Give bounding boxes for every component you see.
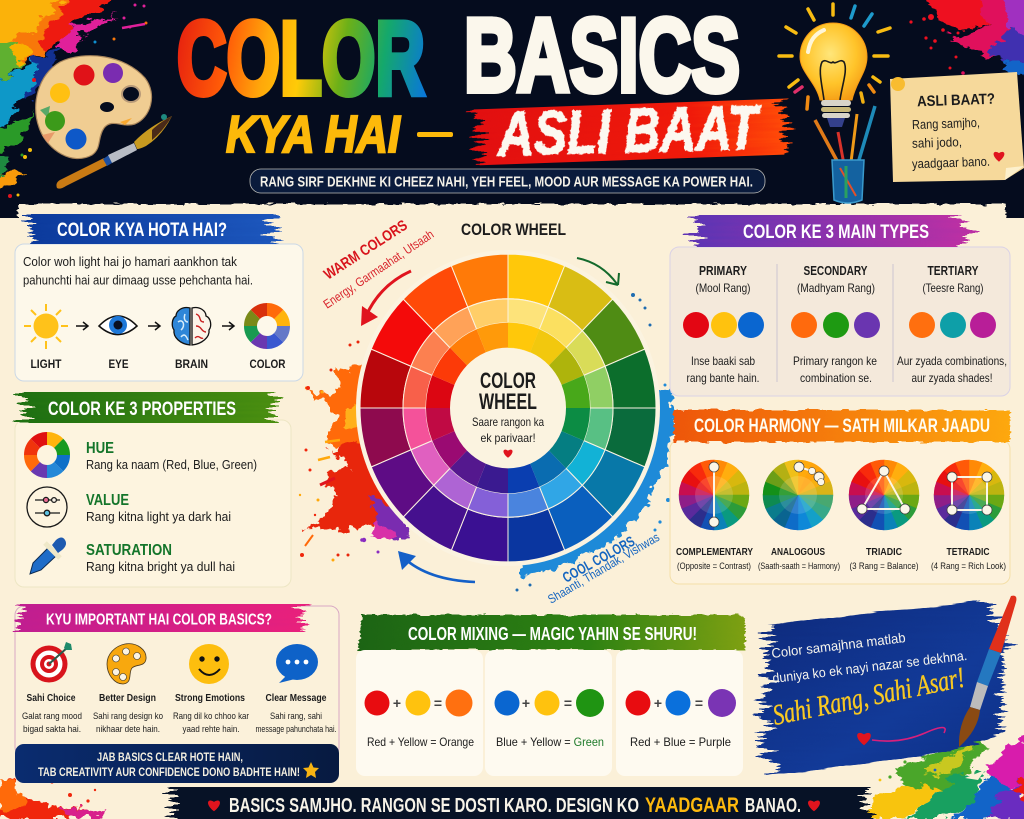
label: warm colors: Energy, Garmaahat, Utsaah: [321, 227, 436, 311]
column: sahi choice: bigad sakta hai.: [23, 724, 81, 735]
harmony: triadic: [847, 458, 921, 571]
card: red yellow: Red + Yellow = Orange: [367, 735, 474, 749]
subtitle: KYA HAI: KYA HAI: [226, 106, 401, 164]
arrow: warm: [361, 271, 411, 326]
column: strong emotions: [173, 692, 249, 735]
card: red blue: +: [654, 695, 662, 711]
color wheel: [350, 243, 666, 573]
labels: light eye brain color: LIGHT: [30, 357, 62, 371]
arrow: cool: [398, 551, 475, 582]
icon: paintbrush: [56, 114, 172, 189]
text: value: VALUE: [86, 492, 129, 509]
text: saturation: [86, 542, 235, 574]
callout: blue brush quote: Sahi Rang, Sahi Asar!: [770, 662, 967, 732]
labels: light eye brain color: EYE: [108, 357, 128, 371]
harmony: tetradic: [931, 458, 1006, 571]
harmony: triadic: (3 Rang = Balance): [850, 561, 919, 571]
column: secondary: (Madhyam Rang): [797, 281, 875, 295]
callout: blue brush quote: Color samajhna matlab: [771, 630, 906, 661]
banner: mixing: [358, 615, 745, 650]
harmony: triadic: TRIADIC: [866, 547, 902, 558]
splash: bottom right rainbow: [870, 733, 1024, 819]
label: cool colors: COOL COLORS: [560, 534, 638, 586]
banner: important: [22, 604, 302, 632]
background: dark header: [0, 0, 1024, 225]
icon: orange palette: [107, 644, 146, 684]
column: primary: rang bante hain.: [686, 371, 760, 385]
banner: types: [697, 215, 965, 247]
column: primary: (Mool Rang): [696, 281, 750, 295]
column: tertiary: [897, 264, 1007, 385]
note: asli baat: sahi jodo,: [912, 134, 962, 151]
bottom banner: [172, 787, 867, 819]
text: hue: HUE: [86, 440, 114, 457]
bottom banner: BASICS SAMJHO. RANGON SE DOSTI KARO. DESIGN KO: [229, 795, 639, 817]
heading: color wheel: COLOR WHEEL: [461, 220, 566, 239]
column: primary: PRIMARY: [699, 264, 748, 278]
inner ring: [420, 317, 596, 499]
card: blue yellow: +: [522, 695, 530, 711]
icon: smiley: [189, 644, 229, 684]
panel: color harmony: [670, 410, 1010, 584]
title: BASICS: BASICS: [464, 0, 740, 114]
column: clear message: message pahunchata hai.: [256, 724, 336, 735]
labels: light eye brain color: BRAIN: [175, 357, 208, 371]
note: asli baat: yaadgaar bano.: [912, 154, 990, 171]
tagline pill: RANG SIRF DEKHNE KI CHEEZ NAHI, YEH FEEL, MOOD AUR MESSAGE KA POWER HAI.: [260, 174, 753, 190]
text: hue: [86, 440, 257, 472]
label: cool colors: Shaanti, Thandak, Vishwas: [545, 530, 662, 607]
wheel center text: COLOR: [480, 368, 536, 393]
text: definition: pahunchti hai aur dimaag usse pehchanta hai.: [23, 274, 253, 288]
panel: kyu important: [15, 604, 339, 783]
callout: blue brush quote: [765, 600, 1005, 775]
icon: value sliders: [27, 487, 67, 527]
icon: brush cup: [815, 106, 875, 203]
banner: types: COLOR KE 3 MAIN TYPES: [743, 222, 929, 243]
column: strong emotions: yaad rehte hain.: [182, 724, 240, 735]
icon: artist palette: [36, 56, 152, 159]
icon: brain: [172, 308, 211, 345]
banner: harmony: [674, 410, 1010, 442]
icon: eye: [99, 316, 137, 334]
middle ring: [396, 291, 620, 525]
label: warm colors: WARM COLORS: [321, 217, 411, 283]
arrow: [76, 322, 88, 330]
banner: important: KYU IMPORTANT HAI COLOR BASICS?: [46, 612, 272, 628]
arrow: green: [577, 258, 619, 285]
icon: sun: [24, 304, 68, 349]
column: strong emotions: Rang dil ko chhoo kar: [173, 711, 249, 722]
harmony: analogous: ANALOGOUS: [771, 547, 825, 558]
column: secondary: [791, 264, 880, 385]
card: red blue: =: [695, 695, 703, 711]
text: definition: [23, 255, 253, 288]
labels: light eye brain color: COLOR: [250, 357, 286, 371]
note: asli baat: ASLI BAAT?: [917, 91, 995, 110]
wheel center text: ek parivaar!: [480, 431, 536, 445]
tagline pill: [250, 169, 765, 193]
text: saturation: SATURATION: [86, 542, 172, 559]
column: primary: Inse baaki sab: [691, 354, 755, 368]
icon: color ring: [244, 303, 290, 349]
wheel center text: WHEEL: [479, 389, 537, 414]
callout: blue brush quote: duniya ko ek nayi nazar se dekhna.: [772, 648, 968, 686]
callout: jab basics: [15, 744, 339, 783]
column: better design: Sahi rang design ko: [93, 711, 163, 722]
column: better design: Better Design: [99, 692, 156, 704]
icon: target: [30, 642, 72, 682]
banner: color kya hota hai: COLOR KYA HOTA HAI?: [57, 220, 227, 241]
column: secondary: SECONDARY: [804, 264, 868, 278]
column: secondary: combination se.: [800, 371, 872, 385]
column: clear message: [256, 692, 336, 735]
harmony: complementary: (Opposite = Contrast): [677, 561, 751, 571]
wheel center text: Saare rangon ka: [472, 415, 544, 429]
column: clear message: Clear Message: [266, 692, 327, 704]
icon: light bulb: [779, 4, 890, 127]
harmony: tetradic: TETRADIC: [946, 547, 990, 558]
labels: light eye brain color: [30, 357, 286, 371]
icon: dropper: [30, 538, 66, 574]
splash: top right colors: [909, 0, 1024, 75]
harmony: analogous: [758, 458, 840, 571]
panel: color kya hota hai: [15, 214, 303, 381]
splash: left of wheel: [299, 340, 412, 562]
subtitle: ASLI BAAT brush: ASLI BAAT: [496, 94, 763, 169]
column: better design: nikhaar dete hain.: [96, 724, 160, 735]
text: value: [86, 492, 231, 524]
column: primary: [683, 264, 764, 385]
harmony: complementary: COMPLEMENTARY: [676, 547, 753, 558]
text: value: Rang kitna light ya dark hai: [86, 510, 231, 524]
column: sahi choice: [22, 692, 82, 735]
card: red yellow: [356, 650, 483, 776]
note: asli baat: Rang samjho,: [912, 115, 980, 132]
callout: jab basics: JAB BASICS CLEAR HOTE HAIN,: [97, 752, 243, 764]
column: better design: [93, 692, 163, 735]
card: blue yellow: =: [564, 695, 572, 711]
bottom banner: YAADGAAR: [645, 794, 739, 817]
bottom banner: BANAO.: [745, 795, 801, 817]
banner: properties: COLOR KE 3 PROPERTIES: [48, 399, 236, 420]
banner: properties: [26, 392, 271, 423]
banner: mixing: COLOR MIXING — MAGIC YAHIN SE SHURU!: [408, 624, 697, 644]
splash: top left rainbow: [0, 0, 148, 198]
splash: right of wheel: [516, 293, 673, 592]
text: hue: Rang ka naam (Red, Blue, Green): [86, 458, 257, 472]
background: cream paper: [0, 204, 1024, 819]
panel: color mixing: [356, 615, 745, 776]
callout: jab basics: TAB CREATIVITY AUR CONFIDENCE DONO BADHTE HAIN!: [38, 767, 300, 779]
card: red yellow: +: [393, 695, 401, 711]
banner: color kya hota hai: [30, 214, 275, 244]
column: sahi choice: Galat rang mood: [22, 711, 82, 722]
icon: large paintbrush: [959, 596, 1016, 747]
harmony: complementary: [676, 458, 753, 571]
column: tertiary: aur zyada shades!: [912, 371, 992, 385]
card: blue yellow: [485, 650, 612, 776]
text: saturation: Rang kitna bright ya dull hai: [86, 560, 235, 574]
column: sahi choice: Sahi Choice: [26, 692, 76, 704]
panel: color types: [670, 215, 1010, 396]
arrow: [222, 322, 234, 330]
text: definition: Color woh light hai jo hamari aankhon tak: [23, 255, 238, 269]
column: tertiary: TERTIARY: [928, 264, 979, 278]
column: clear message: Sahi rang, sahi: [270, 711, 322, 722]
icon: hue wheel: [24, 432, 70, 478]
card: blue yellow: Blue + Yellow = Green: [496, 735, 604, 749]
outer ring: [350, 243, 666, 573]
harmony: analogous: (Saath-saath = Harmony): [758, 561, 840, 571]
icon: speech bubble: [276, 644, 318, 683]
harmony: tetradic: (4 Rang = Rich Look): [931, 561, 1006, 571]
card: red yellow: =: [434, 695, 442, 711]
panel: color ke 3 properties: [15, 392, 291, 587]
column: tertiary: (Teesre Rang): [922, 281, 984, 295]
arrow: [148, 322, 160, 330]
card: red blue: Red + Blue = Purple: [630, 735, 731, 749]
column: strong emotions: Strong Emotions: [175, 692, 245, 704]
column: secondary: Primary rangon ke: [793, 354, 877, 368]
note: asli baat: [890, 72, 1024, 182]
card: red blue: [616, 650, 743, 776]
title: COLOR: COLOR: [177, 1, 425, 117]
splash: bottom left: [0, 775, 105, 819]
wheel center text: [472, 368, 544, 458]
